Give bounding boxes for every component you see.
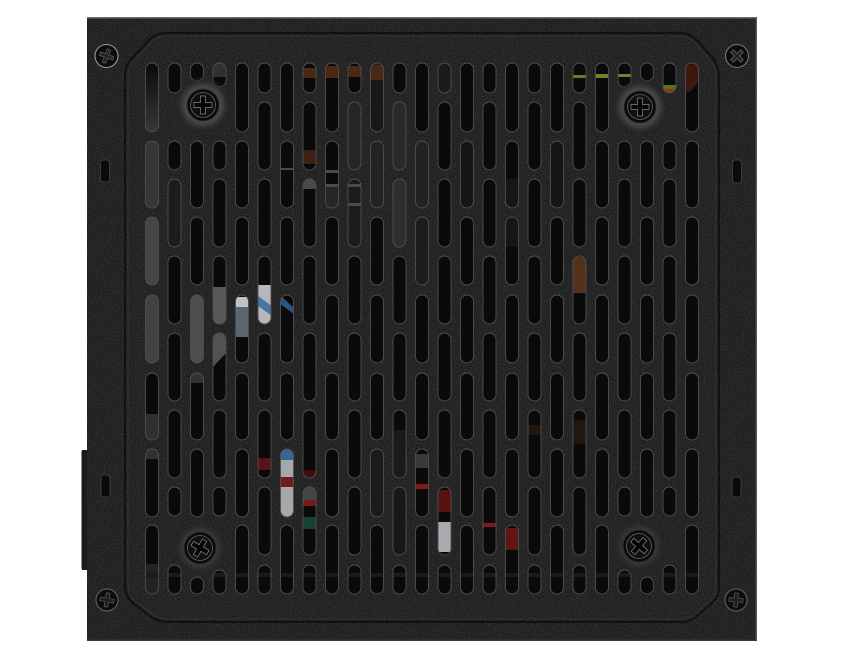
slot rims — [146, 63, 698, 594]
grille slots with interior seen through — [140, 55, 705, 600]
screw: chassis top left — [95, 44, 118, 68]
left side connector tab — [82, 450, 87, 570]
recessed fan panel — [125, 33, 719, 622]
chassis plate — [87, 17, 757, 641]
screw: chassis top right — [726, 44, 748, 68]
screw: bottom right large — [612, 519, 666, 573]
illustration: power supply unit, top-down view — [82, 17, 757, 641]
screw: top left large — [174, 76, 232, 134]
lime and red wires, top right — [573, 62, 698, 93]
horizontal metal bars behind grille — [145, 168, 705, 577]
screw: chassis bottom right — [725, 589, 747, 611]
red wires and white cables, bottom centre right — [415, 420, 587, 552]
blue and white cable bundle, centre left — [235, 285, 317, 529]
powder-coat texture — [87, 18, 755, 639]
screw: chassis bottom left — [96, 589, 118, 611]
small chassis mounting slots — [100, 160, 742, 497]
screw: bottom left large — [173, 521, 227, 575]
fan blade: grey reflections, left side — [145, 63, 564, 594]
orange transformer windings — [303, 65, 587, 293]
screw: top right large — [611, 78, 669, 136]
